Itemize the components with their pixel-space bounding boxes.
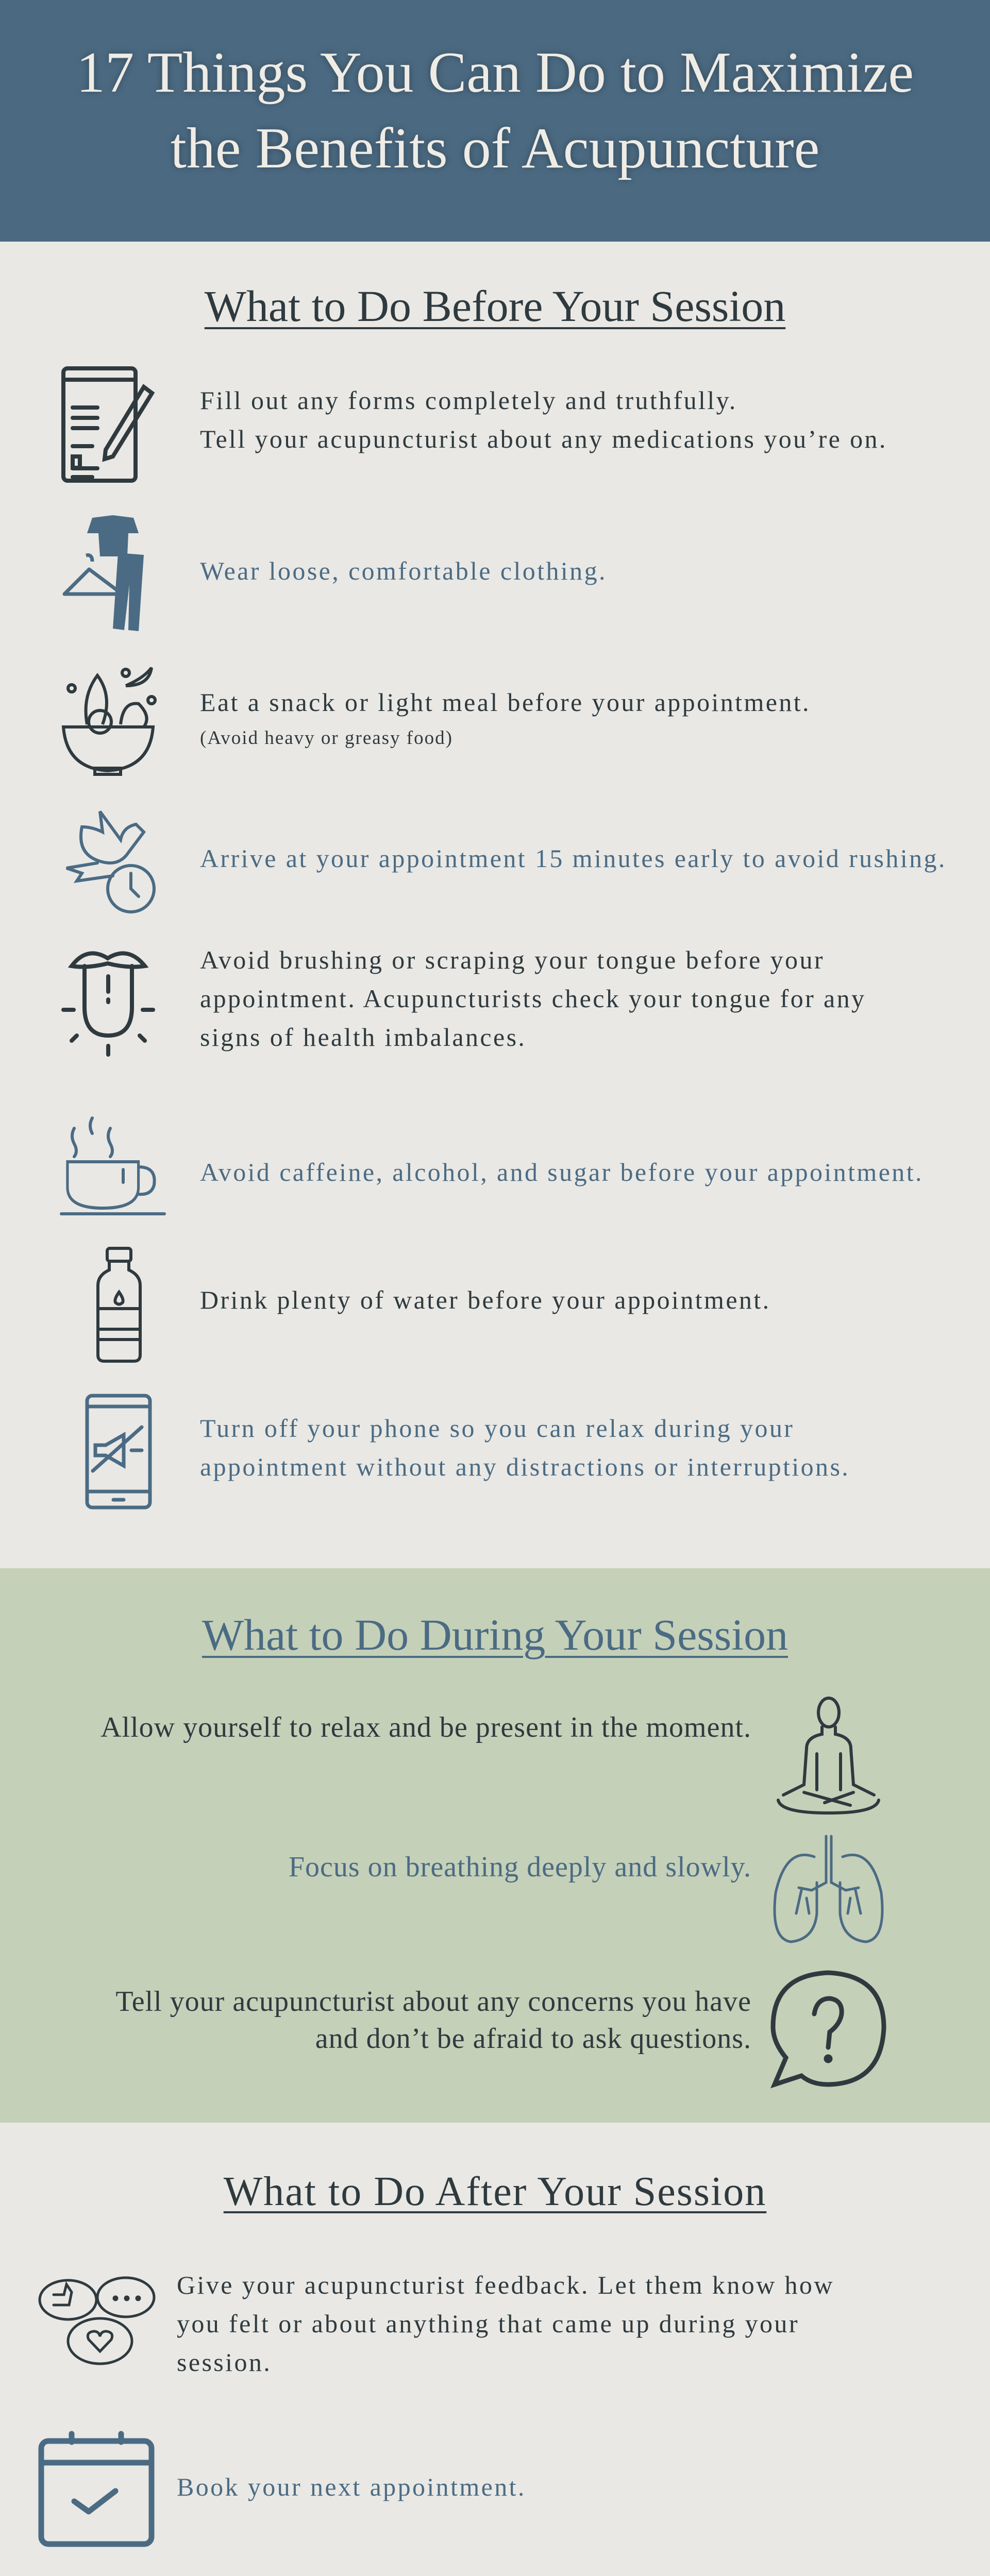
icon: tongue bbox=[61, 951, 155, 1057]
text: water: Drink plenty of water before your appointment. bbox=[200, 1285, 771, 1314]
icon: muted phone bbox=[86, 1394, 152, 1510]
text: phone: appointment without any distractions or interruptions. bbox=[200, 1452, 850, 1481]
heading: before session: What to Do Before Your Session bbox=[205, 281, 785, 331]
text: arrive early: Arrive at your appointment 15 minutes early to avoid rushing. bbox=[200, 844, 947, 873]
icon: water bottle bbox=[96, 1247, 142, 1363]
text: snack: Eat a snack or light meal before your appointment. bbox=[200, 688, 811, 717]
icon: hot cup bbox=[60, 1116, 166, 1215]
text: questions: and don’t be afraid to ask questions. bbox=[315, 2023, 751, 2055]
title bbox=[76, 41, 914, 182]
text: tongue bbox=[200, 945, 866, 1052]
text: forms: Fill out any forms completely and truthfully. bbox=[200, 386, 737, 415]
text: feedback: you felt or about anything that came up during your bbox=[177, 2309, 799, 2338]
text: questions bbox=[115, 1986, 751, 2055]
icon: feedback bubbles bbox=[38, 2276, 156, 2365]
text: relax: Allow yourself to relax and be present in the moment. bbox=[100, 1711, 751, 1743]
text: breathing: Focus on breathing deeply and slowly. bbox=[289, 1851, 751, 1883]
heading: during session: What to Do During Your Session bbox=[202, 1610, 788, 1659]
icon: form with pencil bbox=[61, 366, 155, 483]
text: book next: Book your next appointment. bbox=[177, 2472, 526, 2501]
heading: after session: What to Do After Your Session bbox=[224, 2169, 766, 2214]
title: the Benefits of Acupuncture bbox=[171, 116, 819, 180]
text: caffeine: Avoid caffeine, alcohol, and sugar before your appointment. bbox=[200, 1158, 924, 1187]
text: phone: Turn off your phone so you can relax during your bbox=[200, 1414, 794, 1443]
text: phone bbox=[200, 1414, 850, 1481]
title: 17 Things You Can Do to Maximize bbox=[76, 41, 914, 105]
text: tongue: signs of health imbalances. bbox=[200, 1023, 526, 1052]
icon: calendar check bbox=[38, 2431, 155, 2547]
panel: during session bbox=[0, 1568, 990, 2123]
text: clothing: Wear loose, comfortable clothing. bbox=[200, 556, 607, 585]
icon: question bubble bbox=[770, 1970, 886, 2089]
icon: meditation bbox=[777, 1697, 880, 1815]
text: feedback bbox=[177, 2270, 834, 2377]
icon: clothing bbox=[63, 515, 144, 631]
text: tongue: Avoid brushing or scraping your tongue before your bbox=[200, 945, 825, 974]
text: questions: Tell your acupuncturist about any concerns you have bbox=[115, 1986, 751, 2018]
icon: salad bowl bbox=[62, 667, 157, 776]
header band bbox=[0, 0, 990, 242]
text: feedback: Give your acupuncturist feedback. Let them know how bbox=[177, 2270, 834, 2299]
icon: lungs bbox=[773, 1835, 883, 1943]
icon: bird and clock bbox=[66, 810, 156, 913]
text: tongue: appointment. Acupuncturists check your tongue for any bbox=[200, 984, 866, 1013]
text: snack note: (Avoid heavy or greasy food) bbox=[200, 727, 453, 749]
text: forms bbox=[200, 386, 887, 453]
text: forms: Tell your acupuncturist about any medications you’re on. bbox=[200, 425, 887, 453]
text: feedback: session. bbox=[177, 2348, 272, 2377]
